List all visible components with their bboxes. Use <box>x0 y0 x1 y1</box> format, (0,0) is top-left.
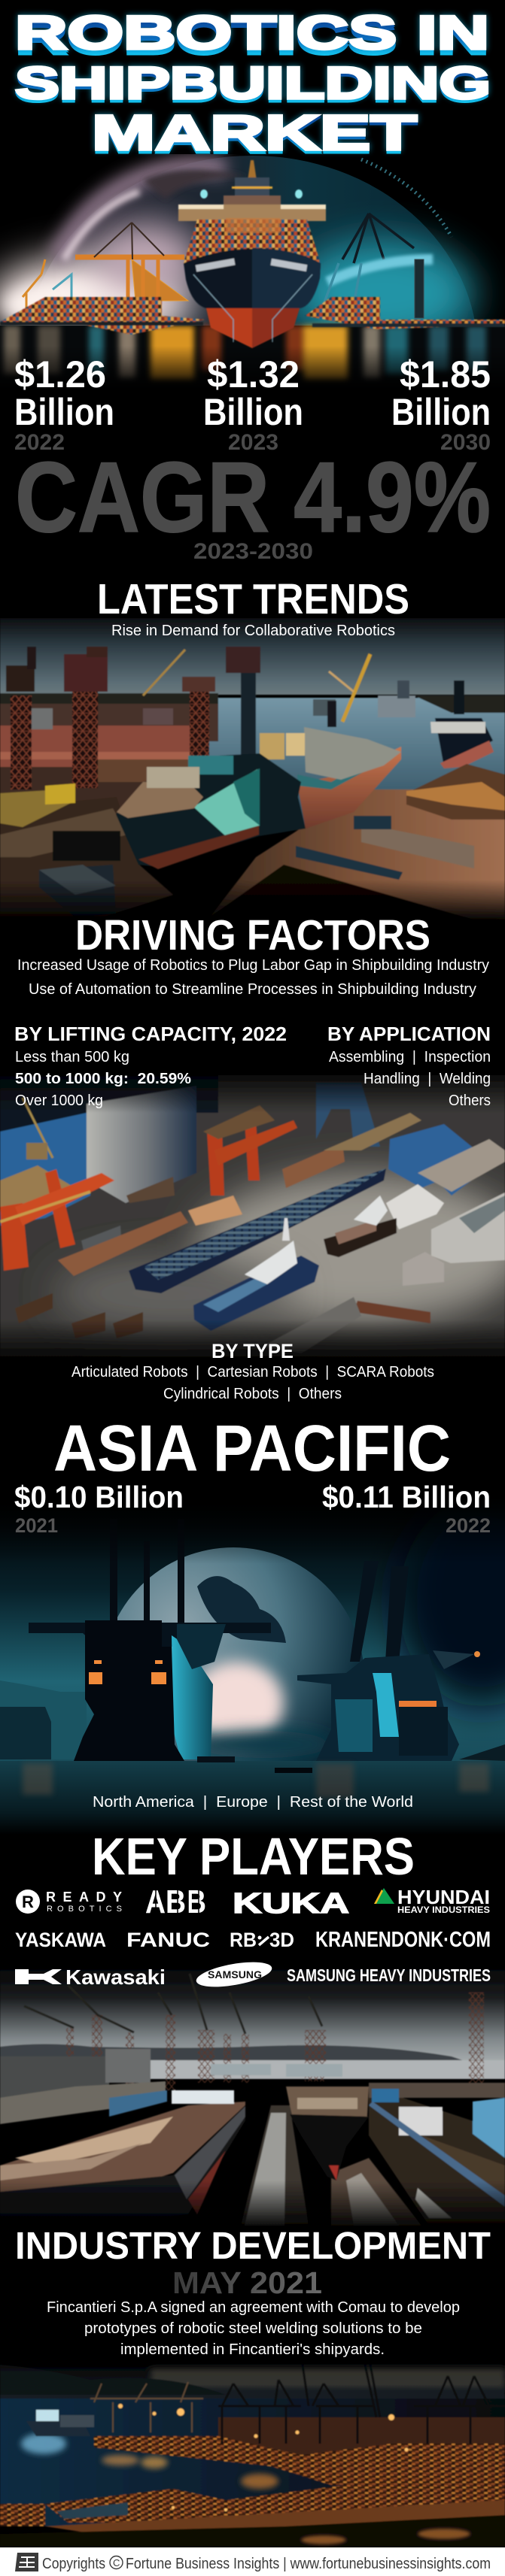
logo: Ready Robotics <box>16 1890 122 1914</box>
logo: Kawasaki <box>15 1965 166 1989</box>
logo: RB3D: 3D <box>269 1929 294 1951</box>
tall grey building <box>87 1086 196 1203</box>
hills <box>0 2365 226 2395</box>
development date: MAY 2021 <box>172 2265 322 2300</box>
small brown ship <box>324 1196 397 1257</box>
type segment: Articulated Robots | Cartesian Robots | SCARA Robots <box>71 1364 434 1380</box>
logo: Ready Robotics: ROBOTICS <box>47 1905 122 1914</box>
region value 2021: 2021 <box>15 1514 58 1537</box>
driving factor 1: Increased Usage of Robotics to Plug Labor Gap in Shipbuilding Industry <box>17 957 489 974</box>
wet dock channel <box>241 2105 421 2226</box>
development description <box>47 2299 460 2358</box>
icon: Fortune Business Insights logo <box>15 2553 38 2571</box>
application segment: Handling | Welding <box>364 1071 491 1087</box>
city lights horizon <box>151 2367 505 2388</box>
logo: Hyundai Heavy Industries: HYUNDAI <box>397 1886 490 1908</box>
dark foreground roof <box>188 865 505 932</box>
tower cranes <box>24 1974 484 2098</box>
application segment: Assembling | Inspection <box>329 1049 491 1065</box>
left ship silhouette <box>29 1555 271 1761</box>
logo: RB3D <box>230 1929 294 1951</box>
logo: RB3D: RB <box>230 1929 257 1951</box>
title line 1: ROBOTICS IN <box>15 7 489 59</box>
region value 2022: 2022 <box>446 1514 491 1537</box>
water <box>151 2060 505 2079</box>
cargo blocks <box>81 1113 505 1263</box>
orange barge <box>58 1211 188 1276</box>
foreground water <box>0 2515 505 2547</box>
type segment <box>71 1340 434 1402</box>
title <box>15 7 491 163</box>
region value 2021: $0.10 Billion <box>14 1480 184 1514</box>
title line 2: SHIPBUILDING <box>15 58 491 108</box>
title line 1: ROBOTICS IN <box>15 12 489 65</box>
title line 2: SHIPBUILDING <box>15 58 491 108</box>
quayside ground <box>0 783 505 921</box>
sea <box>203 698 505 826</box>
dry dock illustration <box>0 1962 505 2361</box>
title line 3 <box>92 105 417 163</box>
top fade <box>0 2357 505 2372</box>
logo: Ready Robotics: R <box>22 1893 34 1911</box>
title line 1: ROBOTICS IN <box>15 7 489 59</box>
region value 2021 <box>14 1480 184 1537</box>
water reflections <box>21 2433 278 2489</box>
title line 3: MARKET <box>92 105 417 160</box>
application segment: BY APPLICATION <box>327 1023 491 1045</box>
market value 2023 <box>203 353 303 455</box>
water <box>0 2399 505 2526</box>
distant white ships <box>211 2064 342 2077</box>
logo: Hyundai Heavy Industries <box>374 1886 490 1915</box>
title line 3: MARKET <box>92 105 417 160</box>
dockside container stacks <box>0 297 505 335</box>
distant cranes <box>90 2382 203 2432</box>
right crane <box>324 214 433 318</box>
fade to black <box>0 2181 505 2229</box>
red gantry crane left <box>0 1098 114 1271</box>
left cranes <box>23 223 188 320</box>
key players heading: KEY PLAYERS <box>92 1827 415 1886</box>
lifting capacity segment: Over 1000 kg <box>15 1093 103 1109</box>
foreground logs <box>15 1293 430 1353</box>
type segment: Cylindrical Robots | Others <box>163 1386 342 1402</box>
market value 2030: $1.85 <box>400 353 491 395</box>
hero illustration: container ship with cranes under planet <box>0 154 505 382</box>
third ship <box>430 680 494 768</box>
blue ship <box>193 1218 319 1331</box>
red gantry crane centre <box>203 1105 297 1196</box>
quay edge <box>45 2500 505 2538</box>
market value 2023: $1.32 <box>207 353 300 395</box>
logo: Hyundai Heavy Industries: HEAVY INDUSTRIES <box>397 1905 490 1915</box>
planet <box>0 154 500 326</box>
water with reflections <box>0 326 505 412</box>
CAGR period: 2023-2030 <box>193 539 313 564</box>
development description: implemented in Fincantieri's shipyards. <box>120 2341 385 2358</box>
development description: prototypes of robotic steel welding solutions to be <box>84 2320 422 2337</box>
market value 2030 <box>391 353 491 455</box>
copyright text: C <box>113 2557 120 2568</box>
white warehouse blocks <box>386 1184 505 1286</box>
isometric port illustration <box>0 1068 505 1436</box>
lifting capacity segment: 500 to 1000 kg: 20.59% <box>15 1071 191 1087</box>
container ship <box>178 160 326 348</box>
title line 1 <box>15 7 489 65</box>
title line 1: ROBOTICS IN <box>15 9 489 62</box>
market value 2022 <box>14 353 114 455</box>
region value 2022: $0.11 Billion <box>322 1480 491 1514</box>
logo: Samsung: SAMSUNG <box>208 1968 262 1980</box>
teal ship <box>116 753 306 869</box>
top fade <box>110 1496 505 1559</box>
harbour water <box>0 1756 505 1835</box>
logo: KUKA: KUKA <box>233 1888 349 1920</box>
distant ships <box>313 680 415 717</box>
title line 2: SHIPBUILDING <box>15 61 491 111</box>
second ship <box>260 701 401 829</box>
mountains <box>0 1680 505 1761</box>
type segment: BY TYPE <box>211 1340 294 1362</box>
yard lights <box>118 2404 408 2511</box>
night port illustration <box>0 2357 505 2547</box>
shipyard cranes <box>6 647 370 789</box>
region heading: ASIA PACIFIC <box>53 1412 451 1485</box>
logo: Fanuc: FANUC <box>126 1929 210 1951</box>
other regions: North America | Europe | Rest of the World <box>93 1794 413 1811</box>
latest trends text: Rise in Demand for Collaborative Robotics <box>111 623 395 639</box>
market value 2022: Billion <box>14 391 114 433</box>
market value 2030: Billion <box>391 391 491 433</box>
title line 3: MARKET <box>92 108 417 163</box>
vignette <box>399 1496 505 1707</box>
logo: Kawasaki: Kawasaki <box>65 1965 166 1989</box>
blue gantry <box>316 1083 476 1196</box>
application segment <box>327 1023 491 1109</box>
right ship <box>297 1561 480 1761</box>
lifting capacity segment <box>14 1023 287 1109</box>
right-side ground and buildings <box>369 2083 505 2226</box>
market value 2030: 2030 <box>440 430 491 455</box>
market value 2022: $1.26 <box>14 353 106 395</box>
moon <box>117 1547 363 1761</box>
white ship <box>26 2410 94 2436</box>
lifting capacity segment: BY LIFTING CAPACITY, 2022 <box>14 1023 287 1045</box>
large ship under construction <box>0 2090 245 2237</box>
shipyard illustration <box>0 618 505 1011</box>
ground <box>0 1075 505 1361</box>
logo: Yaskawa: YASKAWA <box>15 1929 106 1951</box>
gantry cranes <box>218 2365 505 2444</box>
second ship bow <box>286 2087 369 2181</box>
region value 2022 <box>322 1480 491 1537</box>
night sky <box>0 1531 505 1761</box>
far shore <box>0 693 505 713</box>
market value 2022: 2022 <box>14 430 65 455</box>
latest trends heading: LATEST TRENDS <box>97 575 409 623</box>
title line 3: MARKET <box>92 106 417 162</box>
red yard buildings <box>0 704 218 808</box>
industry development heading: INDUSTRY DEVELOPMENT <box>15 2224 491 2267</box>
fades <box>0 880 505 1011</box>
driving factors heading: DRIVING FACTORS <box>75 911 430 959</box>
ship window glows <box>89 1660 166 1684</box>
driving factor 2: Use of Automation to Streamline Processes in Shipbuilding Industry <box>29 981 476 998</box>
footer bar <box>0 2547 505 2576</box>
development description: Fincantieri S.p.A signed an agreement with Comau to develop <box>47 2299 460 2316</box>
logo: Samsung <box>194 1957 274 1992</box>
logo: Ready Robotics: READY <box>46 1890 122 1905</box>
sky <box>0 2357 505 2402</box>
fades <box>0 1068 505 1436</box>
moonlit port illustration <box>0 1496 505 1835</box>
sea <box>0 1083 196 1226</box>
title line 2 <box>15 58 491 111</box>
market value 2023: 2023 <box>228 430 278 455</box>
left building and concrete yard <box>0 2049 167 2124</box>
container yards <box>0 2417 505 2526</box>
lifting capacity segment: Less than 500 kg <box>15 1049 129 1065</box>
overcast sky <box>0 1962 505 2064</box>
hills <box>0 2044 467 2062</box>
market value 2023: Billion <box>203 391 303 433</box>
application segment: Others <box>449 1093 491 1109</box>
sky <box>0 618 505 695</box>
copyright text: Copyrights <box>42 2556 105 2572</box>
title line 2: SHIPBUILDING <box>15 59 491 110</box>
logo: ABB: ABB <box>145 1884 206 1920</box>
long dark blue barge <box>129 1168 386 1293</box>
spot-lit ground <box>53 1173 505 1331</box>
quay structures <box>39 764 505 917</box>
